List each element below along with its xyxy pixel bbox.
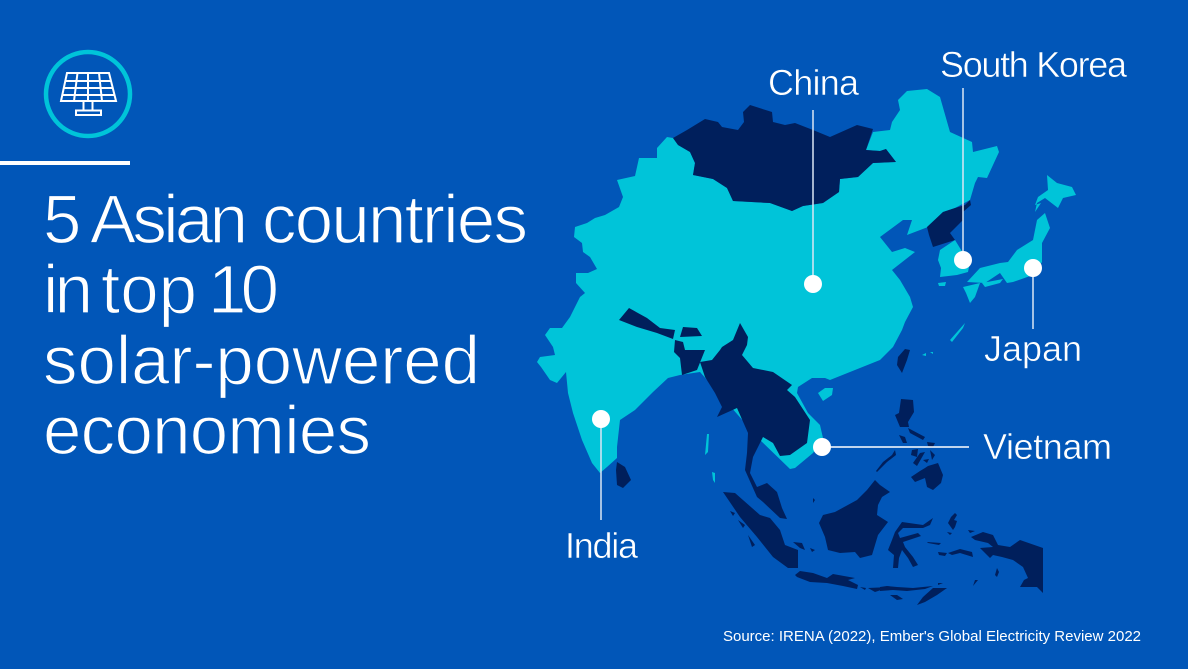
icon: solar panel in circle [46,52,130,136]
map of Asia [537,89,1076,605]
title: 5 [43,181,81,258]
other land: New Guinea and Maluku [927,513,1043,593]
other land: Sri Lanka [616,462,631,488]
highlighted land: Hainan [818,388,833,401]
other land: Mongolia [673,105,896,211]
other land: Borneo [819,480,890,558]
marker: China [768,62,860,293]
marker: South Korea: South Korea [940,44,1128,85]
title [43,181,528,469]
title: Asian [90,181,248,258]
other land: Philippines and Taiwan [876,349,943,490]
other land: Sulawesi [888,518,933,568]
marker: Japan [984,259,1082,369]
other land: North Korea [927,200,971,247]
Andaman islands [705,434,715,483]
other land: Lesser Sunda islands [880,580,978,605]
title: 10 [208,251,279,328]
divider rule [0,161,130,165]
highlighted land: South Korea [938,240,970,286]
title: in [43,251,93,328]
other land: Sumatra and Java [723,492,890,592]
highlighted land: Japan [922,175,1076,356]
highlighted land: China and India [537,89,999,473]
source note: Source: IRENA (2022), Ember's Global Electricity Review 2022 [723,628,1141,645]
marker: South Korea [940,44,1128,269]
marker: India: India [565,525,639,566]
marker: Vietnam: Vietnam [983,426,1112,467]
title: countries [262,181,528,258]
title: top [101,251,197,328]
other land: Nepal, Bhutan, Bangladesh [619,308,705,375]
other land: Myanmar, Thailand, Laos, Cambodia, Malay Peninsula [700,323,810,519]
marker: Vietnam [813,426,1112,467]
marker: Japan: Japan [984,328,1082,369]
title: economies [43,392,371,469]
marker: India [565,410,639,566]
title: solar-powered [43,322,480,399]
marker: China: China [768,62,860,103]
